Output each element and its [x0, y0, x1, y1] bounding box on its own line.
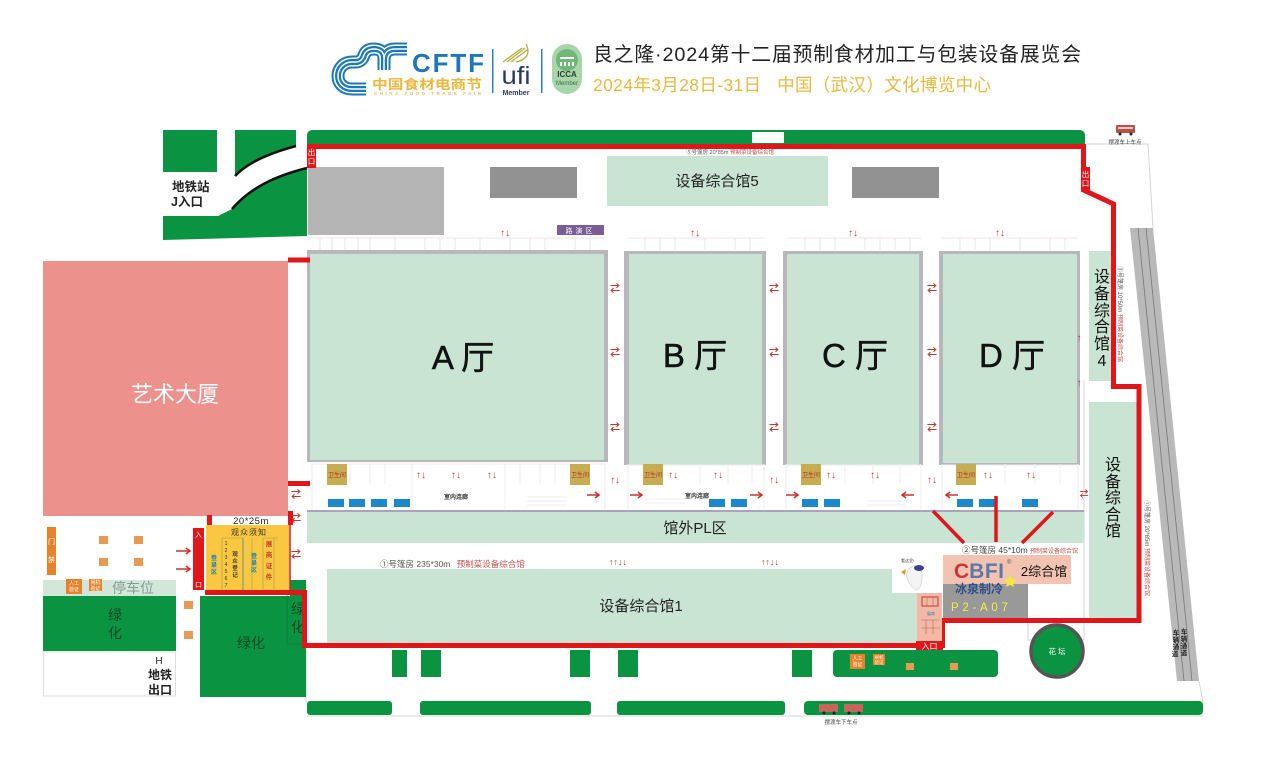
side equipment hall: 设 [1105, 456, 1121, 474]
entrance left: 口 [195, 581, 202, 589]
registration zone: 3 [225, 555, 228, 561]
flower bed [1031, 625, 1083, 677]
vehicle road: 通 [1181, 641, 1188, 650]
white gap in green belt [752, 132, 784, 143]
gray plots [308, 167, 939, 235]
indoor corridor: 室内连廊 [444, 493, 468, 501]
flow arrows: ↑↓ [826, 470, 836, 481]
vehicle road [1130, 228, 1199, 681]
exit top right: 出 [1082, 169, 1089, 179]
flow arrows: ↑↓ [848, 228, 858, 239]
registration zone: 录 [251, 559, 257, 567]
site boundary thin lines [306, 144, 1203, 716]
flow arrows: ↑↓ [927, 475, 937, 486]
H metro exit: 地铁 [148, 667, 172, 682]
south green bed with kiosks: 验证 [874, 659, 884, 666]
registration zone: 4 [225, 562, 228, 568]
flow arrows: ⇄ [610, 346, 620, 359]
entrance booth plan: 展商 [927, 610, 935, 616]
green area left [43, 596, 176, 651]
art tower [43, 261, 288, 516]
tent 3 label: ③号篷房 10*50m 预制菜设备综合馆 [1116, 266, 1124, 362]
hall C: C 厅 [822, 337, 888, 374]
flow arrows: ↑↓ [870, 470, 880, 481]
hall 4 tent: 馆 [1094, 335, 1110, 353]
green area left: 绿 [108, 607, 122, 623]
green area centre [200, 580, 306, 697]
exit top right: 口 [1082, 179, 1089, 188]
outdoor PL zone: 馆外PL区 [663, 520, 727, 537]
CBFI booth banner: ® [1007, 559, 1012, 566]
tent 4 label: ①号篷房 20*85m 预制菜设备综合馆 [1143, 500, 1151, 596]
hall 4 tent: 综 [1094, 302, 1110, 320]
faded north structure band [309, 238, 1078, 250]
registration zone: 区 [211, 569, 217, 576]
flow arrows: ↑↓ [610, 475, 620, 486]
roadshow area: 路演区 [566, 226, 596, 235]
entrance left [193, 528, 204, 590]
flow arrows: ⇄ [927, 421, 937, 434]
entrance left: 入 [195, 531, 202, 539]
divider [492, 49, 494, 93]
shuttle pick-up point [1108, 125, 1142, 146]
green area centre: 化 [291, 619, 305, 635]
flow arrows: ⇄ [927, 282, 937, 295]
flow arrows: ↑↓ [983, 470, 993, 481]
vehicle road: 车 [1181, 627, 1188, 636]
tent 1 label: ①号篷房 235*30m 预制菜设备综合馆 [380, 559, 525, 569]
shuttle drop-off point [819, 704, 863, 726]
CBFI booth banner: CBFI [954, 560, 1004, 583]
indoor corridor: 室内连廊 [685, 492, 709, 500]
entrance south [916, 641, 943, 651]
registration zone: 登 [251, 552, 257, 560]
blue service booths [328, 499, 1038, 507]
registration zone: 登 [211, 554, 217, 562]
metro J entrance area: J入口 [171, 195, 203, 209]
flow arrows: ↑↓ [500, 228, 510, 239]
header logo: ufi: Member [503, 90, 530, 97]
header logo: ufi [502, 44, 530, 97]
gate pass: 门 [48, 537, 55, 546]
flow arrows: ↑ [1076, 378, 1082, 389]
flow arrows: ↑↓ [668, 470, 678, 481]
green strips middle [392, 650, 812, 677]
flower bed: 花 坛 [1048, 646, 1066, 656]
booth P2-A07: P2-A07 [951, 602, 1012, 614]
restrooms: 卫生间 [644, 471, 662, 479]
red block arrows [176, 492, 958, 572]
registration zone: 商 [266, 550, 273, 559]
flow arrows: ↑↓ [451, 470, 461, 481]
flow arrows: ↑↓ [690, 228, 700, 239]
outdoor PL zone [307, 510, 1084, 543]
hall 4 tent: 4 [1098, 353, 1107, 370]
hall 4 tent: 备 [1094, 285, 1110, 303]
flow arrows [291, 228, 1089, 567]
flow arrows: ↑↓ [1026, 470, 1036, 481]
restrooms: 卫生间 [802, 471, 820, 479]
vehicle road: 辆 [1173, 635, 1180, 644]
shuttle drop-off point: 摆渡车下车点 [824, 718, 858, 726]
hall A [310, 254, 604, 460]
flow arrows: ⇄ [769, 282, 779, 295]
red connectors [933, 496, 1053, 543]
parking: 验证 [69, 586, 79, 593]
header logo: ICCA [552, 44, 582, 94]
south green bed with kiosks: 验证 [852, 661, 863, 668]
registration zone: 展 [266, 540, 273, 548]
green area centre: 绿 [291, 601, 305, 617]
hall B: B 厅 [663, 337, 727, 374]
booth P2-A07 [943, 581, 1028, 618]
south green bed with kiosks: 闸机 [874, 654, 884, 661]
registration zone: 1 [225, 541, 228, 547]
restrooms [327, 464, 976, 485]
tent 2 label: ②号篷房 45*10m 预制菜设备综合馆 [962, 545, 1078, 555]
flow arrows: ⇄ [610, 282, 620, 295]
hall 5 tent [607, 156, 828, 206]
title: 良之隆·2024第十二届预制食材加工与包装设备展览会 [593, 44, 1081, 66]
green area left: 化 [108, 625, 122, 641]
flow arrows: ⇄ [291, 548, 301, 561]
vehicle road: 通 [1173, 642, 1180, 651]
gate pass: 禁 [48, 556, 55, 564]
parking: 停车位 [112, 580, 154, 596]
registration zone: 5 [225, 569, 228, 575]
header logo: ICCA: ICCA [557, 70, 577, 79]
side equipment hall: 馆 [1105, 522, 1121, 540]
H metro exit [44, 652, 176, 697]
hall D [943, 254, 1077, 463]
roadshow area [557, 225, 604, 235]
flow arrows: ⇄ [291, 488, 301, 501]
registration zone: 7 [225, 583, 228, 589]
CBFI booth banner [943, 555, 1071, 584]
exit top left: 口 [308, 157, 315, 166]
exit top right [1081, 167, 1090, 191]
registration zone: 观众须知 [231, 527, 267, 537]
20*25m label: 20*25m [233, 516, 269, 527]
restrooms: 卫生间 [328, 471, 346, 479]
green area centre: 绿化 [237, 635, 265, 651]
side equipment hall: 备 [1105, 473, 1121, 491]
metro J entrance area [163, 130, 307, 240]
metro J entrance area: 地铁站 [172, 179, 210, 194]
hall 4 tent: 合 [1094, 318, 1110, 336]
hall frames [307, 250, 1080, 465]
south green strips [307, 701, 1203, 715]
registration zone: 录 [211, 561, 217, 569]
hall 4 tent [1089, 251, 1113, 381]
hall A: A 厅 [432, 339, 494, 376]
registration zone: 件 [266, 572, 273, 581]
H metro exit: 出口 [148, 682, 172, 697]
hall B [629, 254, 762, 465]
mascot [892, 555, 930, 593]
flow arrows: ↑↓ [487, 470, 497, 481]
restrooms: 卫生间 [957, 471, 975, 479]
ticket kiosks [99, 536, 193, 639]
hall 1 tent [327, 569, 918, 643]
hall D: D 厅 [979, 337, 1045, 374]
header logo: CFTF [338, 48, 484, 96]
star marker [1004, 575, 1016, 587]
south green bed with kiosks: 人工 [852, 656, 863, 662]
vehicle road: 车 [1173, 628, 1180, 637]
H metro exit: H [155, 656, 163, 667]
registration zone: 2 [225, 548, 228, 554]
vehicle road: 道 [1172, 649, 1179, 658]
flow arrows: ⇄ [769, 421, 779, 434]
flow arrows: ↑ [1076, 333, 1082, 344]
header logo: ufi: ufi [502, 62, 530, 90]
flow arrows: ↑↓ [995, 228, 1005, 239]
flow arrows: ⇄ [927, 346, 937, 359]
red boundary [205, 146, 1139, 646]
registration zone: 6 [225, 576, 228, 582]
gate pass [47, 527, 56, 575]
hall 5 tent: 设备综合馆5 [675, 173, 759, 190]
vehicle road: 道 [1181, 648, 1188, 657]
flow arrows: ⇄ [769, 346, 779, 359]
parking: 验证 [90, 585, 101, 592]
header logo: ICCA: Member [556, 81, 578, 87]
booth P2-A07: 冰泉制冷 [955, 581, 1003, 596]
exit top left [307, 145, 316, 168]
vehicle road: 辆 [1181, 634, 1188, 643]
parking [43, 579, 176, 596]
flow arrows: ⇄ [1079, 488, 1089, 499]
parking: 闸机 [90, 579, 101, 586]
registration zone [206, 525, 289, 591]
exit top left: 出 [308, 147, 315, 157]
hall 4 tent: 设 [1094, 268, 1110, 286]
divider [541, 49, 542, 93]
entrance south: 入口 [922, 642, 938, 651]
registration zone: 记 [232, 571, 238, 579]
side equipment hall [1089, 402, 1137, 618]
parking: 人工 [69, 581, 79, 587]
CBFI booth banner: 2综合馆 [1021, 564, 1067, 579]
flow arrows: ⇄ [291, 512, 301, 525]
entrance booth plan [917, 593, 942, 641]
flow arrows: ⇄ [610, 421, 620, 434]
registration zone: 登 [232, 564, 238, 572]
date and venue: 2024年3月28日-31日 中国（武汉）文化博览中心 [593, 75, 991, 95]
side equipment hall: 综 [1105, 489, 1121, 507]
indoor corridor [309, 464, 1081, 510]
hall C [787, 254, 919, 465]
flow arrows: ↑↓ [416, 470, 426, 481]
south green bed with kiosks [833, 650, 998, 677]
flow arrows: ↑↑↓↓ [761, 557, 779, 567]
shuttle pick-up point: 摆渡车上车点 [1108, 138, 1142, 146]
restrooms: 卫生间 [571, 471, 589, 479]
art tower: 艺术大厦 [131, 382, 219, 407]
registration zone: 区 [251, 567, 257, 574]
tent 5 label: ⑤号篷房 20*85m 预制菜设备综合馆 [686, 148, 775, 156]
flow arrows: ↑↓ [713, 470, 723, 481]
hall 1 tent: 设备综合馆1 [599, 598, 683, 615]
flow arrows: ↑↓ [769, 475, 779, 486]
registration zone: 众 [232, 558, 238, 565]
mascot: 看这里! [901, 557, 914, 563]
flow arrows: ↑↑↓↓ [609, 557, 627, 567]
header logo: CFTF: 中国食材电商节 [372, 77, 482, 92]
header logo: CFTF: CHINA FOOD TRADE FAIR [374, 91, 482, 96]
side equipment hall: 合 [1105, 506, 1121, 524]
registration zone: 观 [232, 551, 238, 558]
registration zone: 证 [266, 561, 273, 570]
header logo: CFTF: CFTF [412, 48, 484, 78]
green belt top [307, 130, 1085, 144]
